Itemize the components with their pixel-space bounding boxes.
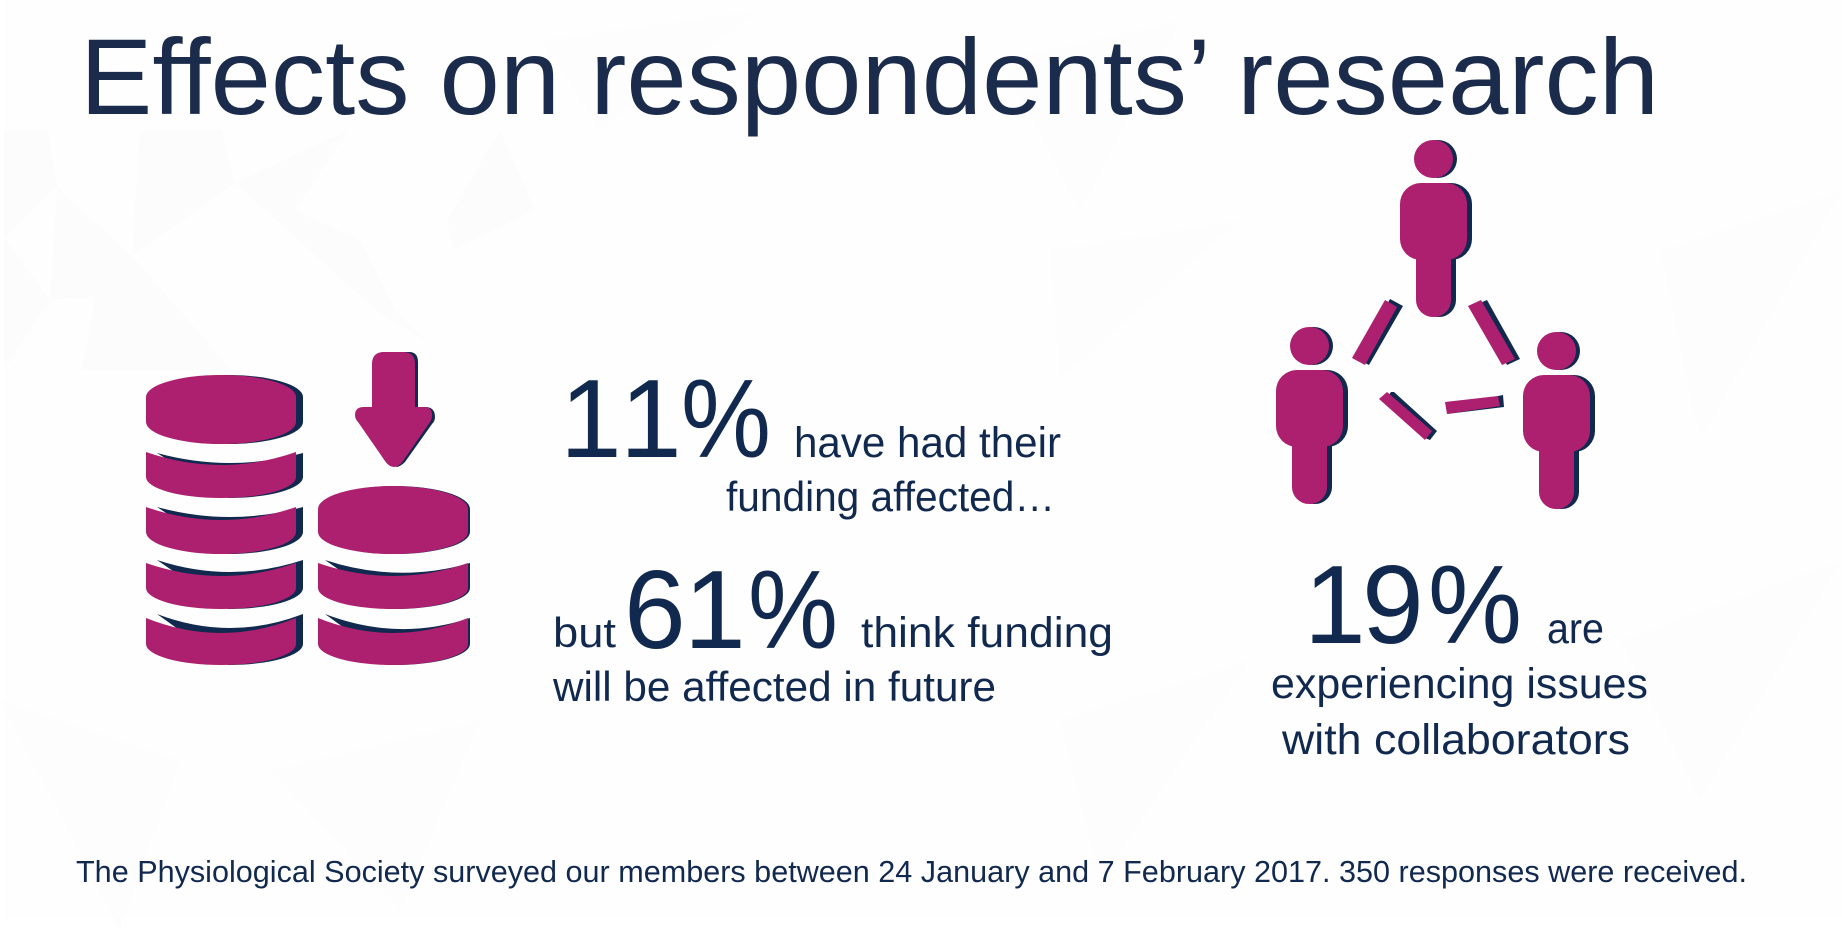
text: think funding: think funding [861,609,1113,657]
text: experiencing issues: experiencing issues [1271,660,1648,708]
icon: down arrow [355,352,435,467]
stat: 19 percent [1304,543,1522,667]
stat: 11 percent [560,357,771,481]
text: will be affected in future: will be affected in future [552,663,996,710]
link: top to right [1468,300,1520,365]
stat: 61 percent: % [748,548,838,672]
link: bottom to right [1445,395,1504,414]
stat: 61 percent [624,548,838,672]
footnote: The Physiological Society surveyed our members between 24 January and 7 February 2017. 350 responses were received. [76,854,1747,889]
link: left to bottom [1379,392,1437,440]
text: are: are [1547,605,1604,653]
icon: three people with broken links [1276,140,1595,509]
stat: 11 percent: % [681,357,771,481]
text: funding affected: funding affected… [726,473,1055,520]
link: top to left [1352,299,1403,365]
icon: right person [1523,332,1595,509]
text: with collaborators: with collaborators [1281,716,1630,764]
stat: 19 percent: 19 [1304,543,1424,667]
icon: coin stacks with down arrow [146,352,470,665]
text: but: but [553,609,616,656]
icon: left person [1276,327,1348,504]
icon: short coin stack [318,486,470,665]
icon: tall coin stack [146,375,303,665]
stat: 11 percent: 11 [560,357,682,481]
text: have had their: have had their [794,419,1061,467]
icon: top person [1400,140,1472,317]
stat: 61 percent: 61 [624,548,746,672]
title: Effects on respondents’ research [80,16,1659,137]
stat: 19 percent: % [1428,543,1522,667]
